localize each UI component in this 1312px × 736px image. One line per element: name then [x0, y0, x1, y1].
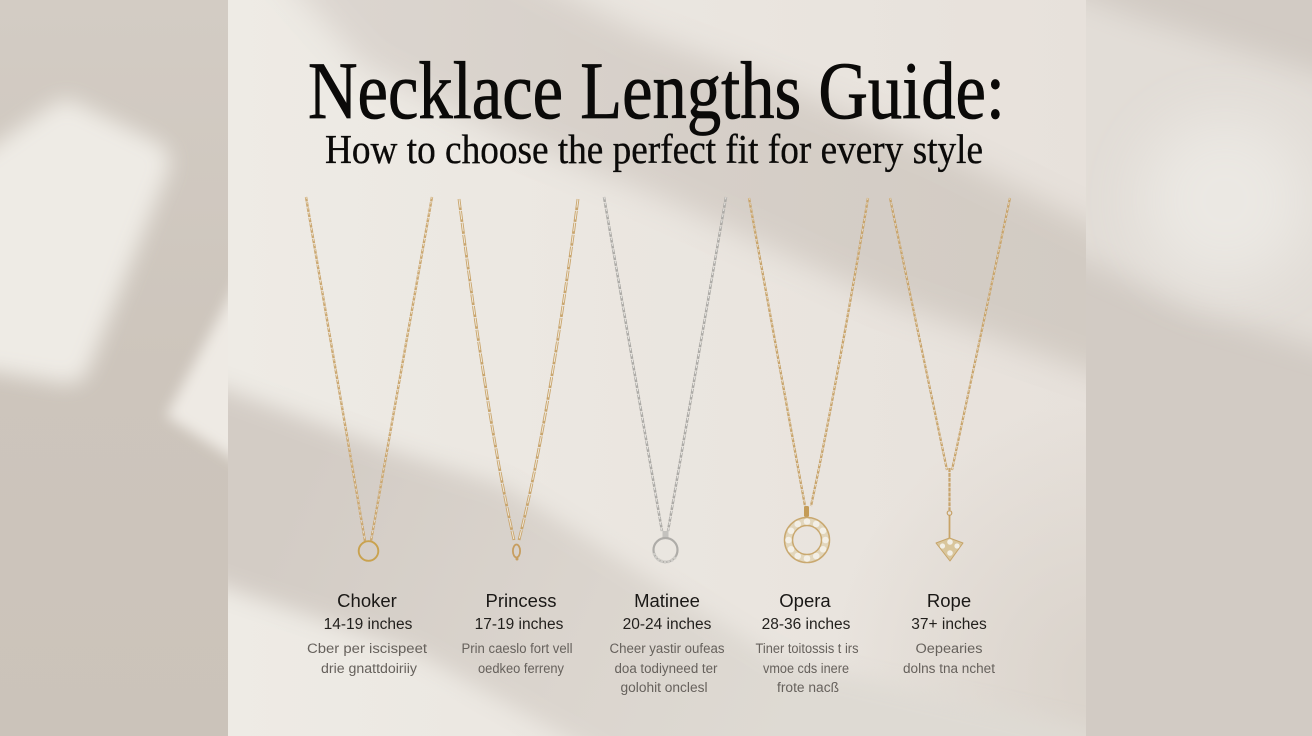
label: matinee: 20-24 inches — [623, 616, 712, 633]
background: left wall — [0, 92, 228, 459]
label: choker — [307, 590, 427, 676]
label: opera: Tiner toitossis t irs — [756, 641, 859, 656]
icon: ring pendant — [359, 541, 378, 561]
label: opera: frote nacß — [777, 680, 839, 695]
necklace: choker — [306, 197, 432, 561]
label: matinee: Matinee — [634, 590, 700, 611]
label: choker: drie gnattdoiriiy — [321, 661, 417, 676]
label: choker: Choker — [337, 590, 397, 611]
label: matinee: doa todiyneed ter — [614, 661, 718, 676]
label: opera: 28-36 inches — [762, 616, 851, 633]
necklace: rope — [890, 198, 1010, 561]
necklace: matinee — [604, 197, 726, 562]
label: opera: Opera — [779, 590, 831, 611]
label: choker: 14-19 inches — [324, 616, 413, 633]
label: matinee: Cheer yastir oufeas — [610, 641, 725, 656]
label: rope: 37+ inches — [911, 616, 987, 633]
label: matinee: golohit onclesl — [620, 680, 708, 695]
label: choker: Cber per iscispeet — [307, 641, 427, 656]
label: opera: vmoe cds inere — [763, 661, 849, 676]
label: princess: Prin caeslo fort vell — [462, 641, 572, 656]
icon: silver ring pendant — [654, 531, 678, 562]
icon: diamond circle pendant — [785, 506, 829, 562]
label: princess: oedkeo ferreny — [478, 661, 564, 676]
label: rope: Rope — [927, 590, 971, 611]
necklace: opera — [749, 198, 868, 562]
background: right wall — [1086, 0, 1312, 356]
label: opera — [756, 590, 859, 695]
label: rope: dolns tna nchet — [903, 661, 995, 676]
label: matinee — [610, 590, 725, 695]
label: rope: Oepearies — [916, 641, 983, 656]
label: princess: Princess — [486, 590, 556, 611]
necklace: princess — [459, 199, 578, 560]
label: princess — [462, 590, 572, 676]
label: rope — [903, 590, 995, 676]
panel: central card — [228, 0, 1086, 736]
subtitle: How to choose the perfect fit for every style — [325, 126, 983, 172]
label: princess: 17-19 inches — [475, 616, 564, 633]
title: Necklace Lengths Guide: — [308, 45, 1005, 136]
icon: arrow pendant — [936, 511, 963, 561]
icon: small link drop — [513, 544, 520, 560]
